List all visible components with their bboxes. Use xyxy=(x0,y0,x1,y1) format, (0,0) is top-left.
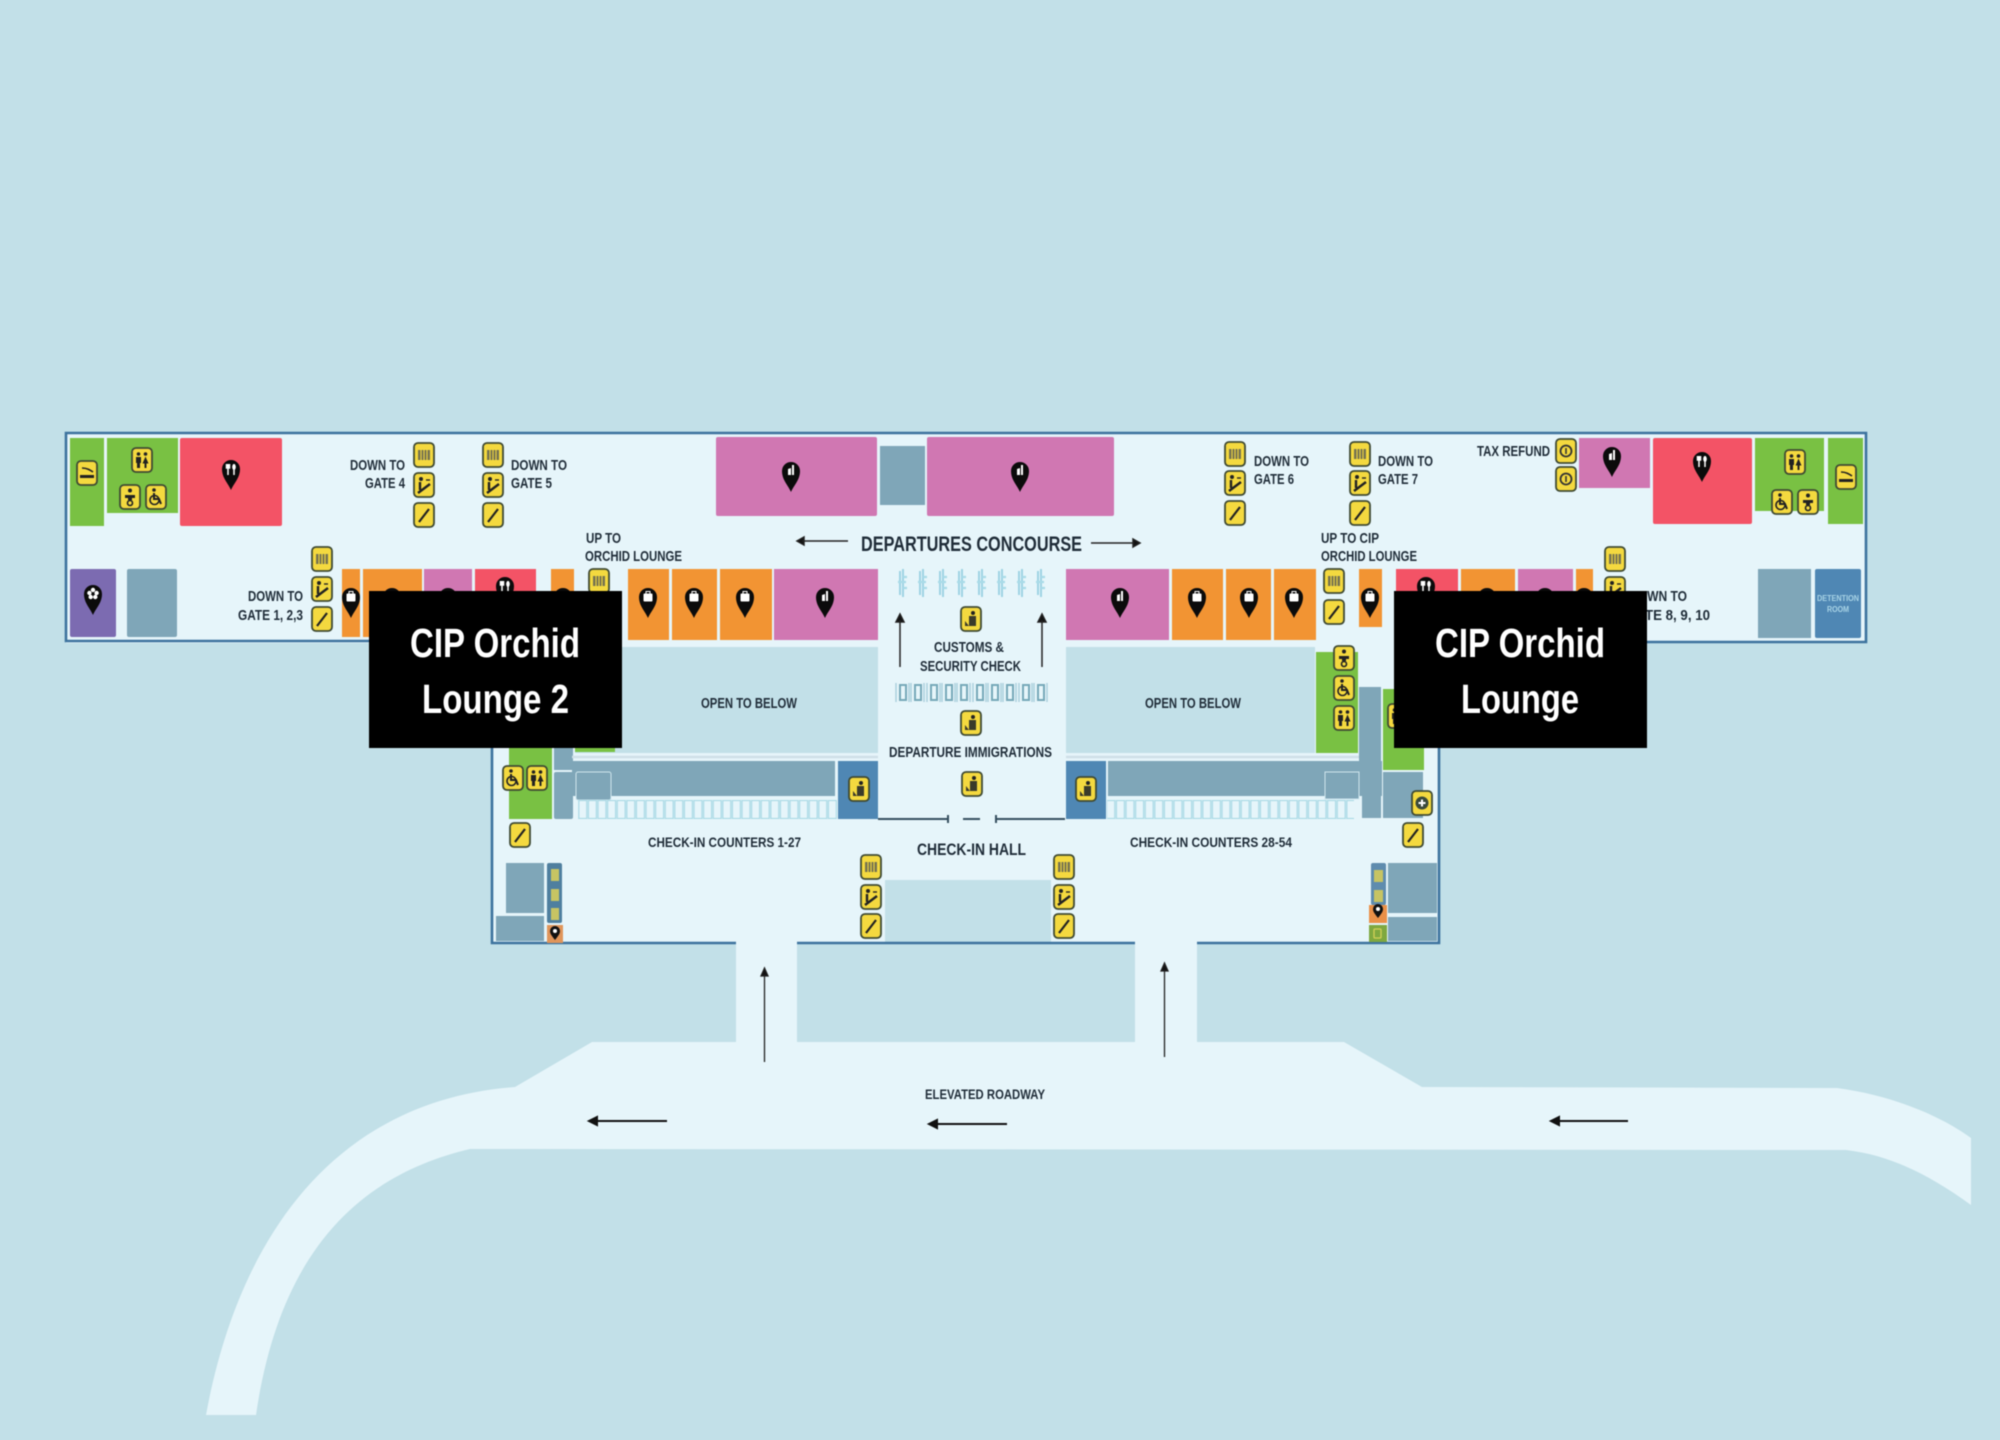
icons: east restroom cluster xyxy=(1334,646,1408,730)
label: up to CIP orchid lounge: ORCHID LOUNGE xyxy=(1321,548,1417,565)
label: check-in counters 28-54: CHECK-IN COUNTERS 28-54 xyxy=(1130,834,1292,850)
panel: west check-in back of house xyxy=(509,740,1360,819)
icons: up to orchid lounge xyxy=(589,569,609,623)
callout: CIP Orchid Lounge 2 xyxy=(369,591,622,748)
text: detention room xyxy=(1817,594,1859,614)
panel: central duty free xyxy=(716,437,1114,516)
terminal floor xyxy=(66,433,1866,943)
label: down to gate 7: GATE 7 xyxy=(1378,471,1418,488)
icons: gates 8 9 10 access xyxy=(1605,547,1625,601)
building walls xyxy=(66,433,1866,943)
label: open to below right: OPEN TO BELOW xyxy=(1145,696,1241,712)
label: down to gates 1 2 3: DOWN TO xyxy=(248,588,303,605)
label: check-in counters 1-27: CHECK-IN COUNTERS 1-27 xyxy=(648,834,801,850)
label: down to gates 8 9 10: GATE 8, 9, 10 xyxy=(1626,607,1710,624)
label: down to gates 8 9 10 xyxy=(1626,588,1710,624)
icons: check-in hall west xyxy=(503,766,881,938)
security lanes xyxy=(898,569,1045,597)
label: customs and security check: SECURITY CHECK xyxy=(920,658,1021,675)
icons: east restrooms xyxy=(1772,450,1856,514)
label: down to gate 7 xyxy=(1378,453,1433,488)
label: down to gate 5: GATE 5 xyxy=(511,475,552,492)
panel: shops east of security xyxy=(1066,569,1593,640)
panel: west restrooms and restaurant xyxy=(70,438,282,637)
label: up to CIP orchid lounge: UP TO CIP xyxy=(1321,530,1379,547)
arrow: roadway traffic centre xyxy=(929,1120,1007,1128)
arrow: roadway to check-in west xyxy=(761,968,768,1062)
label: down to gates 1 2 3: GATE 1, 2,3 xyxy=(238,607,303,624)
panel: check-in hall void xyxy=(885,880,1051,942)
icons: gate 5 access xyxy=(483,443,503,527)
immigration gates xyxy=(896,683,1047,702)
label: down to gate 6: DOWN TO xyxy=(1254,453,1309,470)
arrow: departures concourse left xyxy=(797,537,848,545)
label: up to CIP orchid lounge xyxy=(1321,530,1417,565)
panel: east shops and restrooms xyxy=(1579,438,1863,638)
icons: gate 4 access xyxy=(414,443,434,527)
panel: south-west service rooms xyxy=(496,863,563,943)
arrow: security left xyxy=(896,614,904,667)
callout: CIP Orchid Lounge 2: CIP Orchid xyxy=(410,620,580,666)
label: open to below left: OPEN TO BELOW xyxy=(701,696,797,712)
label: down to gate 4: GATE 4 xyxy=(365,475,405,492)
arrow: roadway traffic east xyxy=(1551,1117,1628,1125)
map pins xyxy=(84,447,1711,618)
panel: shops west of the lounge xyxy=(342,569,878,640)
icons: up to CIP orchid lounge xyxy=(1324,569,1344,624)
label: down to gate 4 xyxy=(350,457,405,492)
check-in hall barrier xyxy=(878,815,1065,823)
label: tax refund: TAX REFUND xyxy=(1477,443,1550,460)
arrow: security right xyxy=(1038,614,1046,667)
label: down to gates 8 9 10: DOWN TO xyxy=(1629,588,1687,605)
panel: open to below left xyxy=(575,647,878,753)
label: departure immigrations: DEPARTURE IMMIGRATIONS xyxy=(889,744,1052,761)
label: down to gate 6: GATE 6 xyxy=(1254,471,1294,488)
icons: tax refund xyxy=(1556,439,1576,491)
icons: gates 1 2 3 access xyxy=(312,547,332,631)
icons: gate 7 access xyxy=(1350,442,1370,525)
callout: CIP Orchid Lounge: CIP Orchid xyxy=(1435,620,1605,666)
arrow: departures concourse right xyxy=(1091,539,1140,547)
elevated roadway xyxy=(206,940,1971,1415)
arrow: roadway to check-in east xyxy=(1161,963,1168,1057)
heading: departures concourse: DEPARTURES CONCOURSE xyxy=(861,533,1082,556)
label: down to gate 6 xyxy=(1254,453,1309,488)
panel: east check-in back of house xyxy=(1066,652,1424,819)
label: customs and security check: CUSTOMS & xyxy=(934,639,1004,656)
icons: west restrooms xyxy=(77,448,166,509)
label: customs and security check xyxy=(920,639,1021,675)
icons: check-in hall east xyxy=(1054,791,1432,938)
icons: security and immigration xyxy=(849,607,1096,801)
label: up to orchid lounge xyxy=(585,530,682,565)
panel: open to below right xyxy=(1066,647,1315,753)
text: detention room: DETENTION xyxy=(1817,594,1859,603)
label: down to gate 4: DOWN TO xyxy=(350,457,405,474)
panel: south-east service rooms xyxy=(1369,863,1437,942)
label: check-in hall: CHECK-IN HALL xyxy=(917,840,1026,859)
callout: CIP Orchid Lounge 2: Lounge 2 xyxy=(422,676,569,722)
callout: CIP Orchid Lounge xyxy=(1394,591,1647,748)
callout: CIP Orchid Lounge: Lounge xyxy=(1461,676,1579,722)
icons: gate 6 access xyxy=(1225,442,1245,525)
label: down to gate 7: DOWN TO xyxy=(1378,453,1433,470)
text: detention room: ROOM xyxy=(1827,605,1849,614)
label: down to gate 5: DOWN TO xyxy=(511,457,567,474)
label: down to gate 5 xyxy=(511,457,567,492)
label: up to orchid lounge: UP TO xyxy=(586,530,621,547)
arrow: roadway traffic west xyxy=(589,1117,667,1125)
label: elevated roadway: ELEVATED ROADWAY xyxy=(925,1086,1046,1102)
label: up to orchid lounge: ORCHID LOUNGE xyxy=(585,548,682,565)
label: down to gates 1 2 3 xyxy=(238,588,303,624)
